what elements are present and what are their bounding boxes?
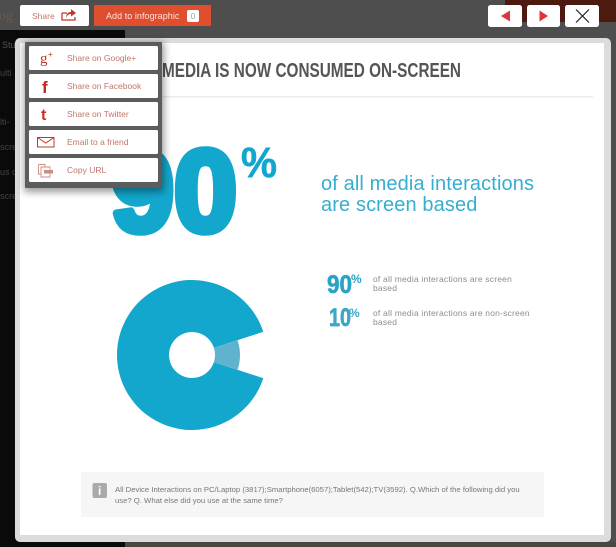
menu item: Facebook: Share on Facebook (67, 81, 142, 91)
menu item: Copy URL (29, 158, 158, 182)
headline: of all media interactions: are screen based (321, 194, 477, 216)
menu item: Google+: Share on Google+ (67, 53, 136, 63)
add to infographic button (94, 5, 211, 26)
stat: 10 percent non-screen based: based (373, 317, 397, 327)
stat: 10 percent non-screen based: 10 (329, 304, 351, 332)
big 90 percent figure: % (241, 139, 277, 187)
background: dimmed page behind modal: us c (0, 167, 17, 177)
menu item: Twitter: Share on Twitter (67, 109, 129, 119)
share button (20, 5, 89, 26)
menu item: Facebook: f (42, 78, 48, 97)
menu item: Google+: + (48, 50, 53, 59)
menu item: Google+: g (40, 51, 48, 67)
headline: of all media interactions (321, 173, 534, 216)
donut chart: 90 / 10 (117, 280, 263, 430)
icon: info: i (98, 484, 101, 498)
menu item: Twitter: t (41, 107, 47, 124)
background: dimmed page behind modal: lti- (0, 117, 10, 127)
stat: 10 percent non-screen based: of all media interactions are non-screen (373, 308, 530, 318)
background: dimmed page behind modal: scre (0, 191, 17, 201)
source note (81, 472, 544, 517)
menu item: Google+ (29, 46, 158, 70)
icon: info (92, 483, 107, 498)
menu item: Facebook (29, 74, 158, 98)
menu item: Copy URL: Copy URL (67, 165, 106, 175)
add to infographic button: 0 (191, 12, 196, 21)
stat: 10 percent non-screen based (329, 304, 530, 332)
next button (527, 5, 560, 27)
menu item: Twitter (29, 102, 158, 126)
stat: 90 percent screen based: 90 (327, 271, 352, 299)
background: dimmed page behind modal: scre (0, 142, 17, 152)
stat: 90 percent screen based: of all media interactions are screen (373, 274, 512, 284)
navigation buttons (488, 5, 599, 27)
big 90 percent figure: 90 (111, 126, 237, 256)
background: dimmed page behind modal: Stu (2, 40, 16, 50)
previous button (488, 5, 522, 27)
stat: 90 percent screen based: % (351, 272, 362, 286)
source note: use? Q. What else did you use at the same time? (115, 496, 283, 505)
stat: 90 percent screen based: based (373, 283, 397, 293)
stat: 90 percent screen based (327, 271, 512, 299)
stat: 10 percent non-screen based: % (349, 306, 360, 320)
background: dimmed page behind modal: ulti (0, 68, 12, 78)
menu item: Email: Email to a friend (67, 137, 129, 147)
source note: All Device Interactions on PC/Laptop (3817);Smartphone(6057);Tablet(542);TV(3592). Q.Which of the following did you (115, 485, 520, 494)
close button (565, 5, 599, 27)
add to infographic button: Add to infographic (106, 11, 180, 21)
headline: of all media interactions: of all media interactions (321, 173, 534, 195)
share menu (24, 42, 164, 192)
share button: Share (32, 11, 55, 21)
menu item: Email (29, 130, 158, 154)
title: MEDIA IS NOW CONSUMED ON-SCREEN (162, 59, 461, 82)
